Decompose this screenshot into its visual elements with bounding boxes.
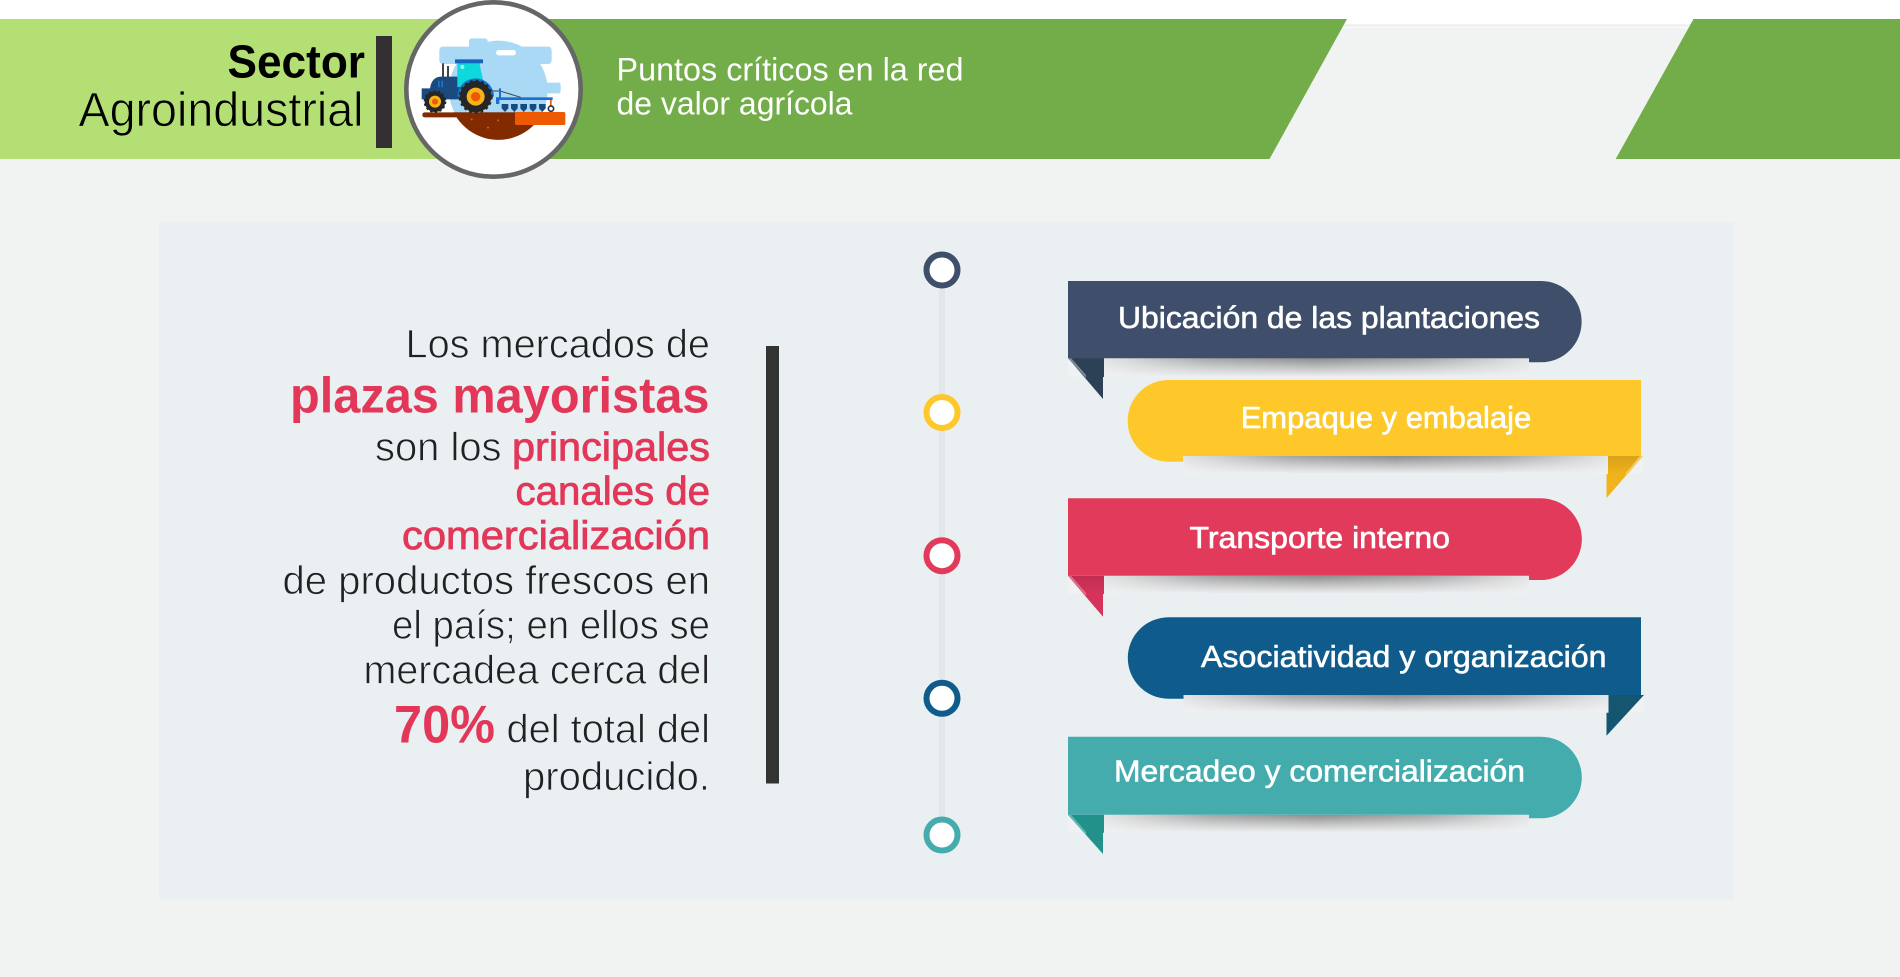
marker: teal <box>926 820 958 850</box>
timeline <box>926 254 958 850</box>
dark green header section <box>490 19 1347 159</box>
ribbon: Mercadeo y comercialización: Mercadeo y comercialización <box>1114 754 1525 789</box>
text block: wholesale markets statement: plazas mayoristas <box>290 368 710 424</box>
panel: main content <box>284 252 1644 854</box>
ribbon: Mercadeo y comercialización <box>1068 737 1582 854</box>
text block: wholesale markets statement: mercadea cerca del <box>364 648 710 692</box>
subtitle <box>616 52 964 121</box>
ribbon: Asociatividad y organización: Asociatividad y organización <box>1201 639 1606 674</box>
text block: wholesale markets statement: de productos frescos en <box>282 559 710 603</box>
text block: wholesale markets statement: comercialización <box>402 514 710 558</box>
text block: wholesale markets statement: principales <box>512 426 710 470</box>
ribbon: Transporte interno <box>1068 498 1582 617</box>
marker: yellow <box>926 397 958 428</box>
title: Sector Agroindustrial <box>78 36 365 137</box>
text block: wholesale markets statement: 70% <box>394 695 495 754</box>
marker: blue <box>926 683 958 714</box>
text block: wholesale markets statement <box>282 323 710 799</box>
title divider bar <box>376 36 392 148</box>
title: Sector Agroindustrial: Sector <box>228 36 365 88</box>
marker: red <box>926 540 958 571</box>
light green header section <box>0 19 500 159</box>
text block: wholesale markets statement: el país; en ellos se <box>392 604 710 648</box>
subtitle: de valor agrícola <box>616 85 853 121</box>
ribbon: Empaque y embalaje: Empaque y embalaje <box>1241 400 1531 435</box>
ribbon: Asociatividad y organización <box>1128 617 1644 736</box>
icon: tractor in circle <box>406 2 581 177</box>
ribbon: Transporte interno: Transporte interno <box>1190 520 1450 555</box>
ribbon: Empaque y embalaje <box>1128 380 1643 498</box>
title: Sector Agroindustrial: Agroindustrial <box>78 84 364 137</box>
header band <box>0 19 1900 159</box>
text block: wholesale markets statement: son los <box>375 426 502 470</box>
ribbon: Ubicación de las plantaciones <box>1068 281 1582 399</box>
right green parallelogram <box>1616 19 1900 159</box>
text divider bar <box>766 346 779 784</box>
marker: navy <box>926 254 958 286</box>
ribbon: Ubicación de las plantaciones: Ubicación de las plantaciones <box>1118 300 1540 335</box>
text block: wholesale markets statement: producido. <box>523 755 710 799</box>
text block: wholesale markets statement: del total del <box>506 707 710 751</box>
text block: wholesale markets statement: canales de <box>516 469 710 513</box>
text block: wholesale markets statement: Los mercados de <box>406 323 710 367</box>
subtitle: Puntos críticos en la red <box>616 52 964 88</box>
